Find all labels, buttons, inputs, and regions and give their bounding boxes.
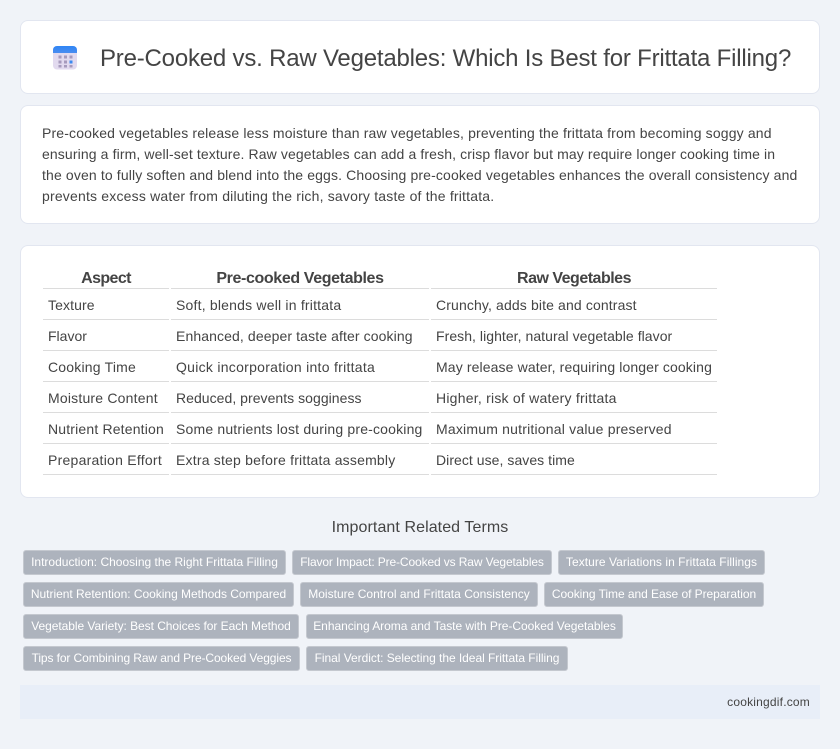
intro text: Pre-cooked vegetables release less moisture than raw vegetables, preventing the frittata from becoming soggy and bbox=[42, 125, 772, 141]
intro panel bbox=[20, 105, 820, 224]
comparison table bbox=[43, 270, 717, 475]
related terms heading: Important Related Terms bbox=[332, 519, 508, 536]
footer bar bbox=[20, 685, 820, 719]
comparison table: Fresh, lighter, natural vegetable flavor bbox=[436, 328, 672, 344]
comparison table: Raw Vegetables bbox=[517, 270, 631, 287]
comparison table: Preparation Effort bbox=[48, 452, 162, 468]
title: Pre-Cooked vs. Raw Vegetables: Which Is Best for Frittata Filling? bbox=[100, 45, 791, 72]
comparison table: May release water, requiring longer cooking bbox=[436, 359, 712, 375]
title card bbox=[20, 20, 820, 94]
comparison table: Cooking Time bbox=[48, 359, 136, 375]
intro text: ensuring a firm, well-set texture. Raw vegetables can add a fresh, crisp flavor but may require longer cooking time in bbox=[42, 146, 775, 162]
icon: calendar bbox=[53, 46, 77, 70]
comparison table: Texture bbox=[48, 297, 95, 313]
related terms tags: Vegetable Variety: Best Choices for Each Method bbox=[31, 619, 291, 633]
comparison table: Reduced, prevents sogginess bbox=[176, 390, 362, 406]
related terms tags: Nutrient Retention: Cooking Methods Compared bbox=[31, 587, 286, 601]
comparison table: Direct use, saves time bbox=[436, 452, 575, 468]
comparison table: Aspect bbox=[81, 270, 131, 287]
related terms tags: Moisture Control and Frittata Consistency bbox=[308, 587, 530, 601]
comparison table: Flavor bbox=[48, 328, 87, 344]
related terms tags: Cooking Time and Ease of Preparation bbox=[552, 587, 756, 601]
comparison table: Pre-cooked Vegetables bbox=[216, 270, 384, 287]
comparison table: Maximum nutritional value preserved bbox=[436, 421, 672, 437]
related terms tags: Texture Variations in Frittata Fillings bbox=[566, 555, 757, 569]
related terms tags: Enhancing Aroma and Taste with Pre-Cooked Vegetables bbox=[313, 619, 616, 633]
comparison table: Higher, risk of watery frittata bbox=[436, 390, 617, 406]
footer source text: cookingdif.com bbox=[727, 695, 810, 709]
comparison table: Moisture Content bbox=[48, 390, 158, 406]
comparison table: Extra step before frittata assembly bbox=[176, 452, 395, 468]
related terms tags bbox=[23, 550, 765, 671]
related terms tags: Tips for Combining Raw and Pre-Cooked Veggies bbox=[32, 651, 291, 665]
comparison table: Some nutrients lost during pre-cooking bbox=[176, 421, 423, 437]
comparison table: Enhanced, deeper taste after cooking bbox=[176, 328, 413, 344]
comparison table: Crunchy, adds bite and contrast bbox=[436, 297, 637, 313]
related terms tags: Introduction: Choosing the Right Frittata Filling bbox=[31, 555, 278, 569]
comparison table: Soft, blends well in frittata bbox=[176, 297, 341, 313]
intro text bbox=[42, 125, 797, 204]
comparison table: Nutrient Retention bbox=[48, 421, 164, 437]
intro text: prevents excess water from diluting the rich, savory taste of the frittata. bbox=[42, 188, 494, 204]
comparison table: Quick incorporation into frittata bbox=[176, 359, 375, 375]
related terms tags: Flavor Impact: Pre-Cooked vs Raw Vegetables bbox=[300, 555, 544, 569]
intro text: the oven to fully soften and blend into the eggs. Choosing pre-cooked vegetables enhances the overall consistency and bbox=[42, 167, 797, 183]
comparison table panel bbox=[20, 245, 820, 498]
related terms tags: Final Verdict: Selecting the Ideal Frittata Filling bbox=[315, 651, 559, 665]
